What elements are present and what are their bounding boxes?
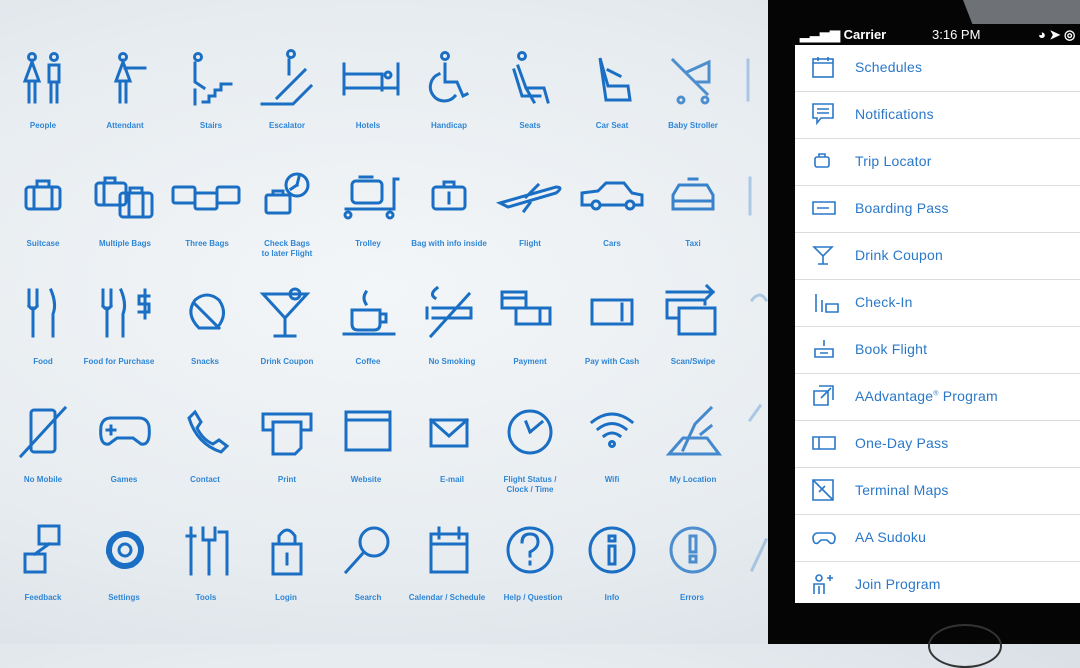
labels row 3: Pay with Cash xyxy=(585,357,639,366)
labels row 1: Escalator xyxy=(269,121,305,130)
icon: taxi xyxy=(673,179,713,209)
labels row 4: Wifi xyxy=(605,475,619,484)
icon: check bags xyxy=(266,174,308,213)
labels row 3: Payment xyxy=(513,357,547,366)
menu list: Check-In xyxy=(855,294,913,310)
labels row 4: Website xyxy=(351,475,382,484)
icon: snacks xyxy=(191,295,224,328)
labels row 5: Info xyxy=(605,593,619,602)
phone top reflection xyxy=(963,0,1080,24)
icon grid xyxy=(18,49,768,602)
icon: search xyxy=(346,528,388,572)
labels row 3: Food xyxy=(33,357,53,366)
icon: print xyxy=(263,414,311,454)
icon: bag with info xyxy=(433,182,465,209)
icon: payment xyxy=(502,292,550,324)
status bar xyxy=(800,27,1075,42)
icon: three bags xyxy=(173,187,239,209)
icon: people xyxy=(25,54,59,102)
menu list: Drink Coupon xyxy=(855,247,943,263)
icon: pay with cash xyxy=(592,300,632,324)
labels row 1: Car Seat xyxy=(596,121,629,130)
labels row 3: Drink Coupon xyxy=(261,357,314,366)
status bar: ◕ ➤ ◎ xyxy=(1038,27,1075,42)
menu list: Schedules xyxy=(855,59,922,75)
labels row 2: Cars xyxy=(603,239,621,248)
labels row 1: Baby Stroller xyxy=(668,121,718,130)
icon: email xyxy=(431,420,467,446)
labels row 2 xyxy=(27,239,701,258)
icon: car seat xyxy=(600,58,630,100)
menu list: Boarding Pass xyxy=(855,200,949,216)
icon: scan/swipe xyxy=(667,286,715,334)
labels row 1: Hotels xyxy=(356,121,381,130)
icon: cars xyxy=(582,183,642,209)
labels row 4: Flight Status / xyxy=(504,475,557,484)
icon: drink coupon xyxy=(263,289,307,336)
labels row 3 xyxy=(33,357,716,366)
labels row 1: Handicap xyxy=(431,121,467,130)
menu list xyxy=(795,45,1080,603)
labels row 3: Food for Purchase xyxy=(84,357,155,366)
icon: food xyxy=(29,290,55,336)
home button xyxy=(928,624,1002,668)
labels row 2: Taxi xyxy=(685,239,701,248)
icon: calendar xyxy=(431,528,467,572)
icon: clock xyxy=(509,411,551,453)
labels row 3: Snacks xyxy=(191,357,220,366)
icon: settings xyxy=(109,534,141,566)
icon: suitcase xyxy=(26,181,60,209)
icon: wifi xyxy=(592,414,632,446)
labels row 5: Login xyxy=(275,593,297,602)
icon: feedback xyxy=(25,526,59,572)
labels row 4: Clock / Time xyxy=(507,485,554,494)
labels row 5: Search xyxy=(355,593,381,602)
labels row 2: to later Flight xyxy=(262,249,313,258)
icon: contact xyxy=(189,412,227,452)
icon: escalator xyxy=(262,50,311,104)
labels row 2: Multiple Bags xyxy=(99,239,152,248)
labels row 3: No Smoking xyxy=(429,357,475,366)
labels row 1: People xyxy=(30,121,57,130)
labels row 1 xyxy=(30,121,718,130)
labels row 2: Bag with info inside xyxy=(411,239,487,248)
phone xyxy=(768,0,1080,644)
icon: coffee xyxy=(344,292,394,334)
labels row 1: Seats xyxy=(519,121,541,130)
labels row 4: My Location xyxy=(670,475,716,484)
labels row 4: Games xyxy=(111,475,138,484)
icon: food for purchase xyxy=(103,290,149,336)
menu list: Terminal Maps xyxy=(855,482,949,498)
labels row 2: Three Bags xyxy=(185,239,229,248)
icon: flight xyxy=(500,185,560,211)
icon: login xyxy=(273,530,301,574)
icon: no smoking xyxy=(427,288,471,336)
labels row 4: Print xyxy=(278,475,296,484)
labels row 5: Help / Question xyxy=(504,593,562,602)
labels row 5: Settings xyxy=(108,593,140,602)
icon: my location xyxy=(669,408,719,454)
labels row 3: Scan/Swipe xyxy=(671,357,716,366)
icon: games xyxy=(101,418,149,444)
icon: no mobile xyxy=(21,408,65,456)
labels row 4 xyxy=(24,475,716,494)
faded column xyxy=(748,60,766,570)
icon: attendant xyxy=(116,54,145,102)
icon: website xyxy=(346,412,390,450)
labels row 4: No Mobile xyxy=(24,475,63,484)
labels row 2: Check Bags xyxy=(264,239,310,248)
menu list: Notifications xyxy=(855,106,934,122)
icon: seats xyxy=(514,52,548,102)
menu list: Trip Locator xyxy=(855,153,932,169)
status bar: ▂▃▅▆ Carrier xyxy=(800,27,886,42)
menu list: Join Program xyxy=(855,576,941,592)
menu list: AAdvantage® Program xyxy=(855,388,998,404)
menu list: Book Flight xyxy=(855,341,927,357)
labels row 4: Contact xyxy=(190,475,220,484)
icon: stairs xyxy=(194,54,231,104)
icon: baby stroller xyxy=(673,60,709,103)
labels row 3: Coffee xyxy=(356,357,381,366)
labels row 5: Errors xyxy=(680,593,705,602)
labels row 5: Tools xyxy=(196,593,217,602)
labels row 1: Stairs xyxy=(200,121,223,130)
icon: errors xyxy=(671,528,715,572)
labels row 5: Feedback xyxy=(25,593,62,602)
menu list: One-Day Pass xyxy=(855,435,948,451)
labels row 4: E-mail xyxy=(440,475,464,484)
labels row 5: Calendar / Schedule xyxy=(409,593,486,602)
labels row 2: Trolley xyxy=(355,239,381,248)
icon: multiple bags xyxy=(96,178,152,217)
labels row 1: Attendant xyxy=(106,121,144,130)
status bar: 3:16 PM xyxy=(932,27,980,42)
icon: hotels xyxy=(344,64,398,94)
icon: tools xyxy=(187,528,227,574)
menu list: AA Sudoku xyxy=(855,529,926,545)
labels row 2: Suitcase xyxy=(27,239,60,248)
icon: handicap xyxy=(430,52,467,101)
labels row 5 xyxy=(25,593,705,602)
icon: trolley xyxy=(345,177,398,218)
icon: info xyxy=(590,528,634,572)
labels row 2: Flight xyxy=(519,239,541,248)
icon: help xyxy=(508,528,552,572)
